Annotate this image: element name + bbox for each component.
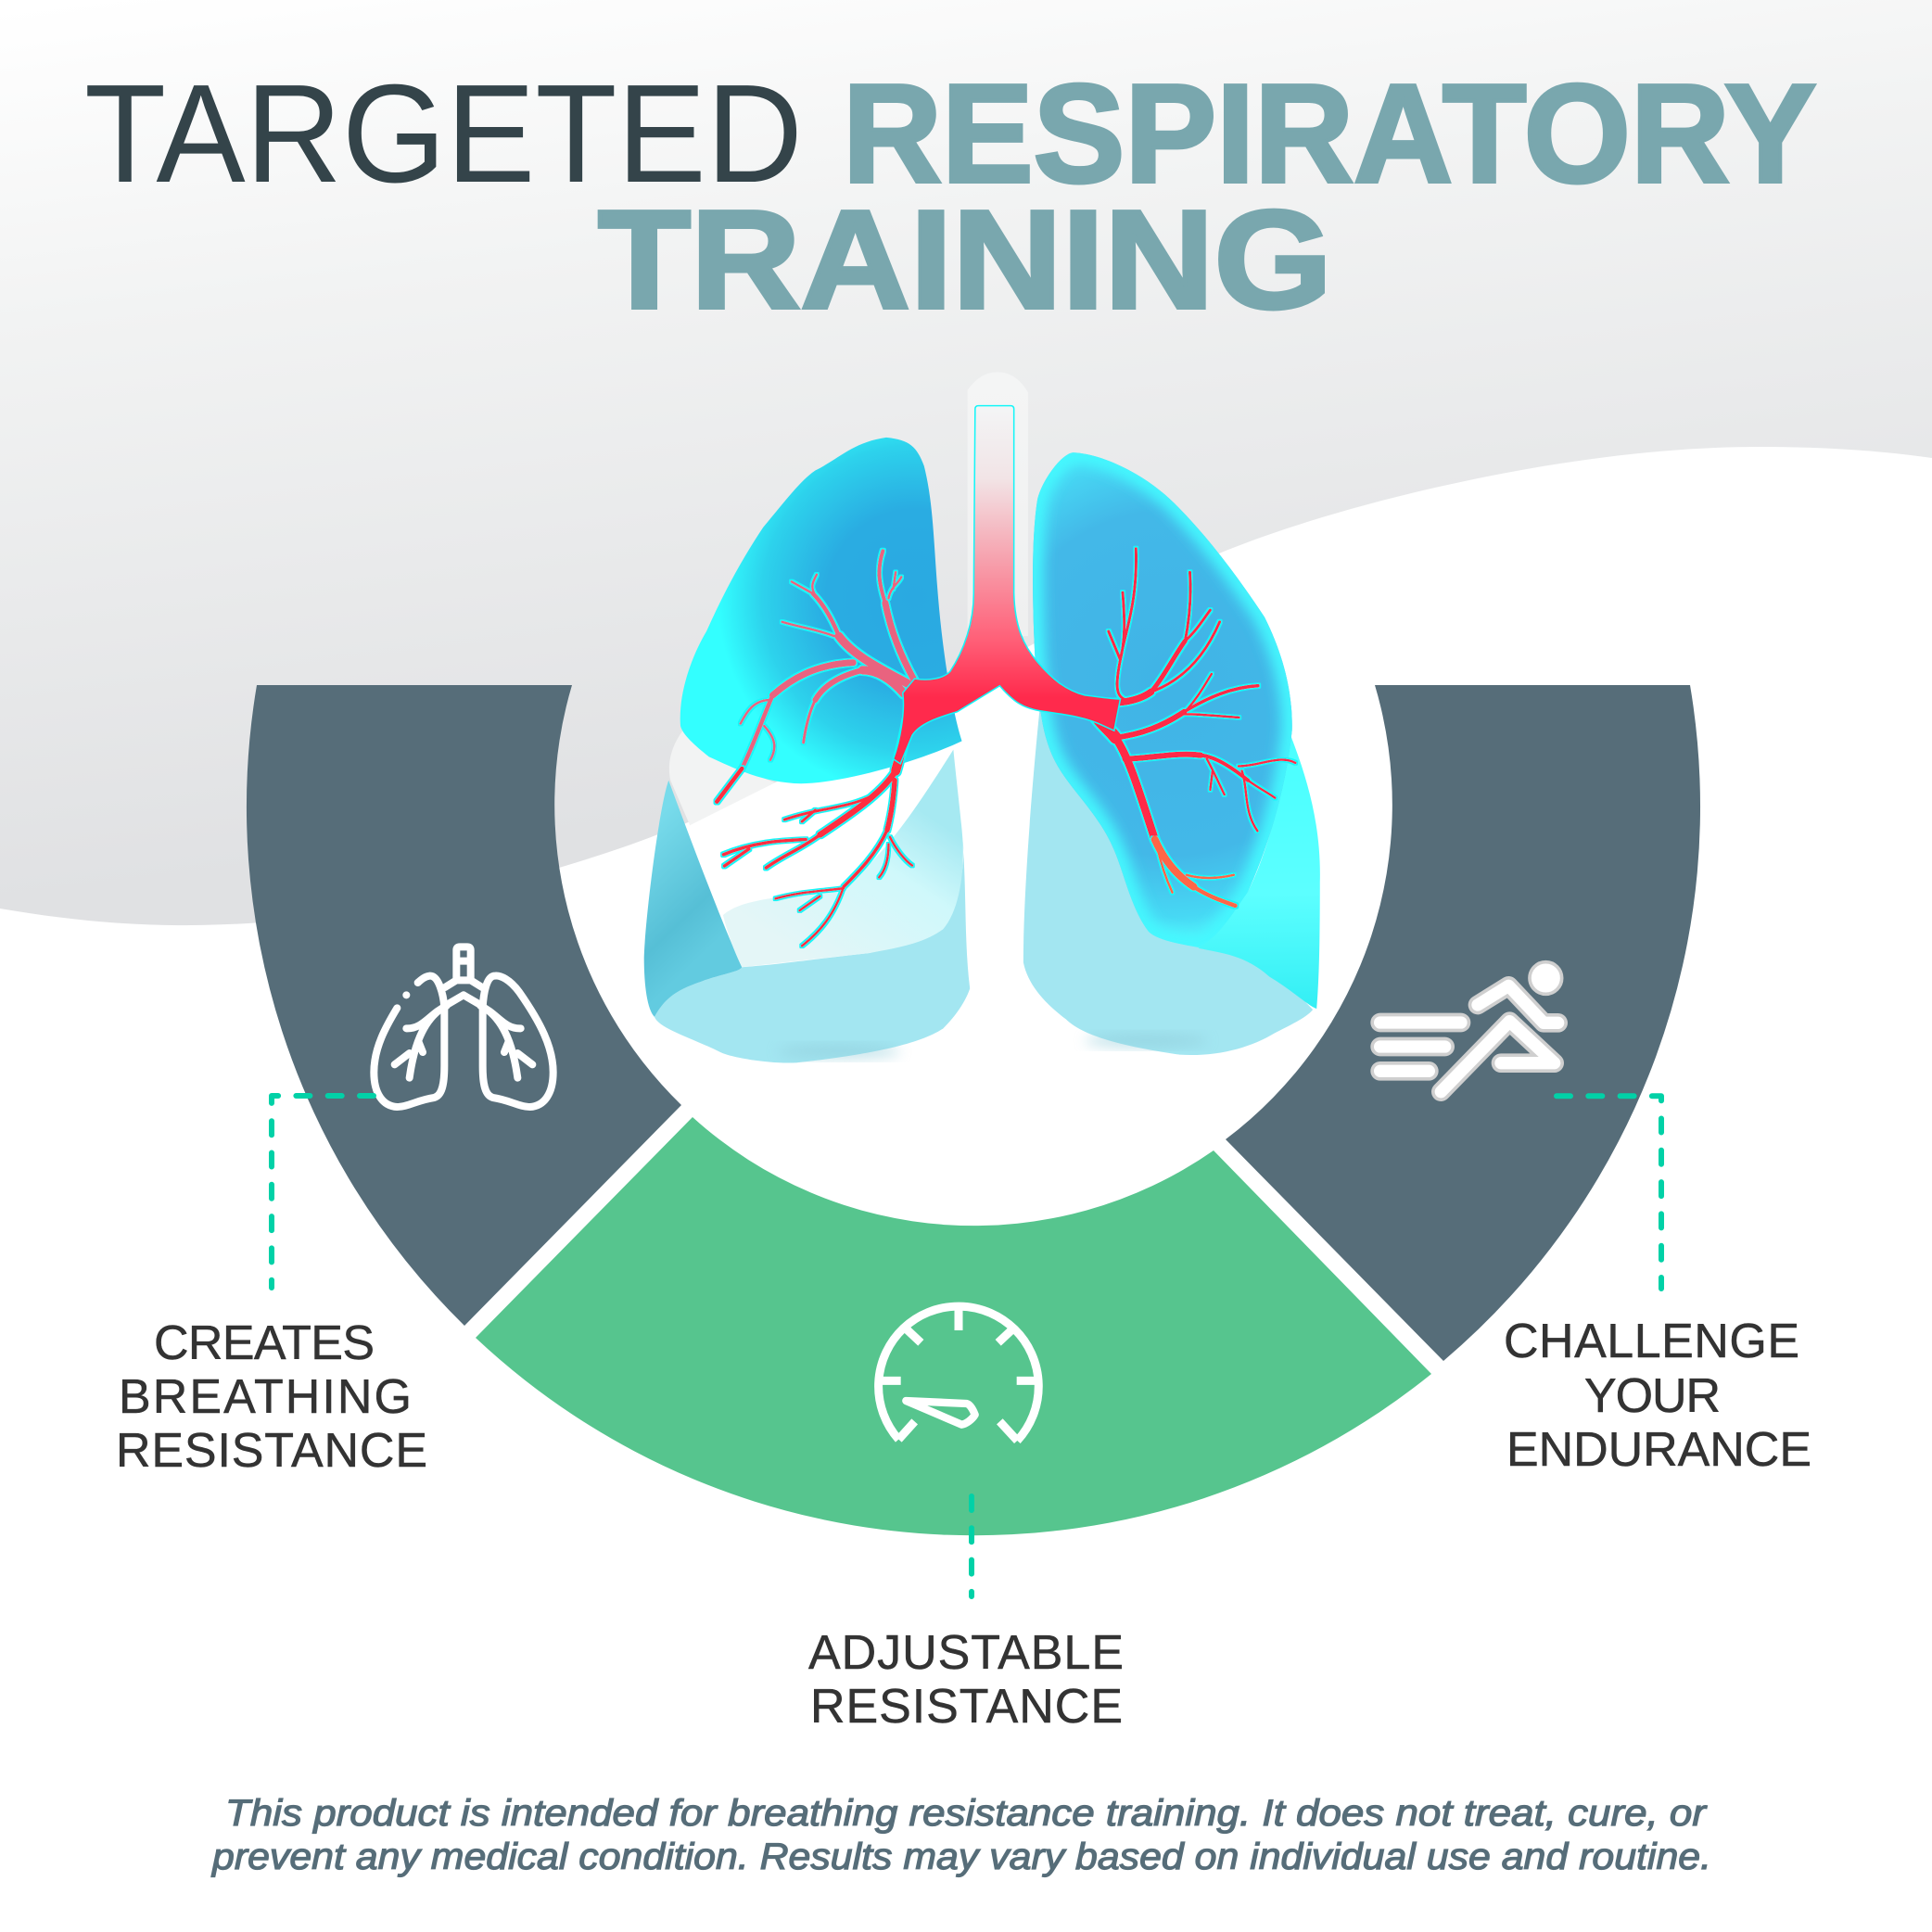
left lung upper lobe — [680, 438, 962, 783]
panel: right ring segment — [1226, 685, 1700, 1361]
trachea halo — [968, 372, 1028, 636]
label: creates breathing resistance: BREATHING — [119, 1370, 412, 1424]
bronchial tree: left upper — [741, 551, 915, 769]
label: adjustable resistance: RESISTANCE — [810, 1680, 1123, 1734]
label: adjustable resistance: ADJUSTABLE — [808, 1626, 1124, 1680]
panel: bottom ring segment — [476, 1117, 1431, 1535]
title — [84, 55, 1816, 337]
label: challenge your endurance: CHALLENGE — [1504, 1315, 1799, 1368]
icon: lungs outline — [374, 947, 553, 1107]
title: TRAINING — [598, 181, 1332, 337]
label: challenge your endurance: ENDURANCE — [1506, 1423, 1811, 1477]
right lung shadow — [1085, 1034, 1208, 1047]
runner outline — [1380, 985, 1558, 1092]
left lung pale panel — [723, 750, 963, 967]
runner fill — [1380, 985, 1558, 1092]
left lung shadow — [778, 1045, 900, 1058]
left lung grey sliver — [669, 731, 775, 825]
panel: left ring segment — [247, 685, 681, 1326]
bronchial tree: left lower — [717, 721, 912, 946]
title: TARGETED — [84, 55, 803, 211]
right lung upper lobe — [1033, 452, 1292, 947]
label: challenge your endurance — [1504, 1315, 1811, 1477]
label: creates breathing resistance — [116, 1316, 427, 1478]
title: RESPIRATORY — [843, 55, 1816, 211]
disclaimer — [211, 1793, 1711, 1877]
left lung side wedge — [644, 781, 742, 1017]
connector: left — [272, 1096, 374, 1288]
bronchial tree: right lower — [1155, 840, 1235, 906]
right lung lower lobe — [1023, 707, 1313, 1055]
connector: bottom — [969, 1496, 974, 1596]
disclaimer: prevent any medical condition. Results may vary based on individual use and routine. — [211, 1837, 1711, 1877]
white wave — [0, 447, 1932, 1932]
label: creates breathing resistance: RESISTANCE — [116, 1424, 427, 1478]
connector: right — [1557, 1096, 1661, 1289]
icon: runner with speed lines — [1380, 962, 1562, 1092]
trachea and main bronchi — [894, 406, 1120, 764]
label: challenge your endurance: YOUR — [1584, 1369, 1721, 1423]
icon: gauge — [879, 1306, 1038, 1441]
right lung side wedge — [1199, 735, 1320, 1009]
left lung lower lobe — [655, 842, 970, 1063]
disclaimer: This product is intended for breathing resistance training. It does not treat, cure, or — [225, 1793, 1708, 1834]
lungs illustration — [644, 372, 1320, 1063]
bronchial tree: right — [1092, 549, 1295, 840]
label: adjustable resistance — [808, 1626, 1124, 1734]
label: creates breathing resistance: CREATES — [154, 1316, 375, 1370]
